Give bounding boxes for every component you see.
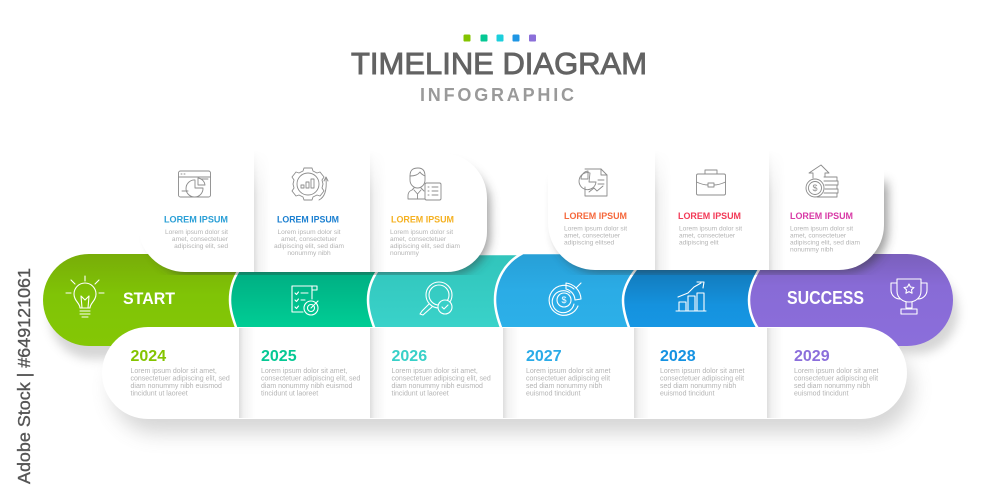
description: sed diam nonummy nibh: [794, 383, 870, 390]
description: amet, consectetuer: [790, 232, 847, 240]
card 2: gear growth: [274, 168, 345, 257]
description: Lorem ipsum dolor sit: [679, 226, 742, 232]
description: [790, 226, 861, 254]
upper card shading: [254, 163, 778, 272]
year: 2029: [794, 348, 830, 365]
description: [794, 368, 878, 398]
band icon: checklist target: [292, 286, 318, 315]
colour dots: [464, 34, 536, 42]
description: Lorem ipsum dolor sit: [390, 229, 453, 236]
description: consectetuer adipiscing elit: [660, 376, 744, 382]
description: euismod tincidunt: [526, 390, 581, 398]
description: [274, 229, 345, 257]
year: 2026: [392, 348, 427, 365]
description: [165, 229, 229, 250]
description: nonummy nibh: [287, 250, 331, 257]
description: sed diam nonummy nibh: [526, 383, 602, 390]
icon: briefcase: [696, 170, 726, 195]
year 2028 block: [660, 348, 744, 398]
year: 2028: [660, 348, 696, 365]
description: consectetuer adipiscing elit: [526, 376, 610, 382]
description: Lorem ipsum dolor sit amet: [794, 368, 878, 375]
description: adipiscing elit, sed diam: [390, 243, 461, 250]
year 2029 block: [794, 348, 878, 398]
description: adipiscing elit: [679, 240, 719, 246]
subheading: INFOGRAPHIC: [420, 85, 574, 105]
description: amet, consectetuer: [564, 232, 621, 240]
band icon: dollar target: $: [561, 295, 567, 305]
upper card group right: base: [548, 120, 884, 270]
icon: gear chart: [292, 168, 328, 200]
description: [526, 368, 610, 398]
description: [564, 226, 627, 246]
description: consectetuer adipiscing elit, sed: [130, 376, 230, 382]
band icon: magnifier check: [420, 282, 452, 315]
icon: coins and arrow: $: [812, 183, 818, 193]
card 1: analytics browser: [164, 171, 229, 250]
label: LOREM IPSUM: [564, 210, 627, 221]
upper card group left: base: [138, 120, 487, 272]
upper card shadows: [150, 160, 888, 275]
label: LOREM IPSUM: [790, 210, 853, 221]
description: Lorem ipsum dolor sit amet: [526, 368, 610, 375]
description: Lorem ipsum dolor sit amet,: [261, 368, 347, 375]
segment: 2025: [230, 270, 390, 330]
description: adipiscing elitsed: [564, 240, 615, 246]
card 3: manager checklist: [390, 168, 461, 257]
description: tincidunt ut laoreet: [261, 390, 318, 398]
description: Lorem ipsum dolor sit: [564, 226, 627, 232]
band label: success: SUCCESS: [787, 288, 864, 308]
lower card group: base: [102, 327, 907, 419]
year: 2025: [261, 348, 297, 365]
year 2026 block: [392, 348, 491, 398]
year: 2027: [526, 348, 562, 365]
card 4: report: [564, 169, 627, 246]
description: sed diam nonummy nibh: [660, 383, 736, 390]
description: adipiscing elit, sed diam: [274, 243, 345, 250]
description: diam nonummy nibh euismod: [261, 383, 353, 390]
description: nonummy: [390, 250, 420, 257]
description: euismod tincidunt: [660, 390, 715, 398]
description: adipiscing elit, sed diam: [790, 240, 861, 246]
description: Lorem ipsum dolor sit amet,: [392, 368, 478, 375]
description: [130, 368, 230, 398]
year 2027 block: [526, 348, 610, 398]
description: consectetuer adipiscing elit, sed: [392, 376, 491, 382]
label: LOREM IPSUM: [277, 214, 339, 224]
segment: 2026: [368, 254, 540, 330]
segment: start pill: [43, 254, 303, 346]
success divider: [749, 268, 760, 330]
stock credit vertical text: Adobe Stock | #649121061: [14, 268, 34, 484]
description: Lorem ipsum dolor sit amet,: [130, 368, 217, 375]
lower card dividers: [239, 328, 783, 418]
icon: person with list: [408, 168, 441, 200]
description: Lorem ipsum dolor sit amet: [660, 368, 744, 375]
description: nonummy nibh: [790, 246, 834, 254]
year 2025 block: [261, 348, 360, 398]
year: 2024: [130, 348, 166, 365]
description: amet, consectetuer: [281, 236, 338, 243]
icon: report document: [579, 169, 607, 196]
description: euismod tincidunt: [794, 390, 849, 398]
description: diam nonummy nibh euismod: [392, 383, 483, 390]
description: Lorem ipsum dolor sit: [790, 226, 853, 232]
band icon: dollar target: [549, 283, 581, 315]
description: diam nonummy nibh euismod: [130, 383, 222, 390]
description: tincidunt ut laoreet: [130, 390, 188, 398]
title block: [351, 34, 647, 105]
ground shadow of timeline: [50, 270, 958, 433]
description: Lorem ipsum dolor sit: [165, 229, 228, 236]
description: [660, 368, 744, 398]
segment: 2027: [495, 253, 660, 330]
segment: success pill: [749, 254, 953, 346]
year 2024 block: [130, 348, 230, 398]
description: amet, consectetuer: [390, 236, 447, 243]
description: tincidunt ut laoreet: [392, 390, 449, 398]
description: Lorem ipsum dolor sit: [277, 229, 341, 236]
main heading: TIMELINE DIAGRAM: [351, 46, 647, 81]
band label: start: START: [123, 289, 176, 308]
description: amet, consectetuer: [172, 236, 229, 243]
segment: 2028: [623, 268, 790, 330]
label: LOREM IPSUM: [391, 214, 454, 224]
timeline band: [43, 253, 953, 346]
label: LOREM IPSUM: [678, 210, 741, 221]
description: [392, 368, 491, 398]
description: amet, consectetuer: [679, 232, 736, 240]
band icon: growth chart: [676, 282, 706, 311]
band icon: light bulb: [66, 276, 104, 317]
description: consectetuer adipiscing elit, sed: [261, 376, 360, 382]
description: adipiscing elit, sed: [174, 243, 228, 250]
card 6: coins: [790, 165, 861, 254]
icon: browser pie chart: [178, 171, 210, 197]
description: [679, 226, 742, 246]
description: consectetuer adipiscing elit: [794, 376, 878, 382]
description: [390, 229, 461, 257]
card 5: briefcase: [678, 170, 742, 246]
label: LOREM IPSUM: [164, 214, 228, 224]
description: [261, 368, 360, 398]
band icon: trophy: [891, 279, 927, 314]
